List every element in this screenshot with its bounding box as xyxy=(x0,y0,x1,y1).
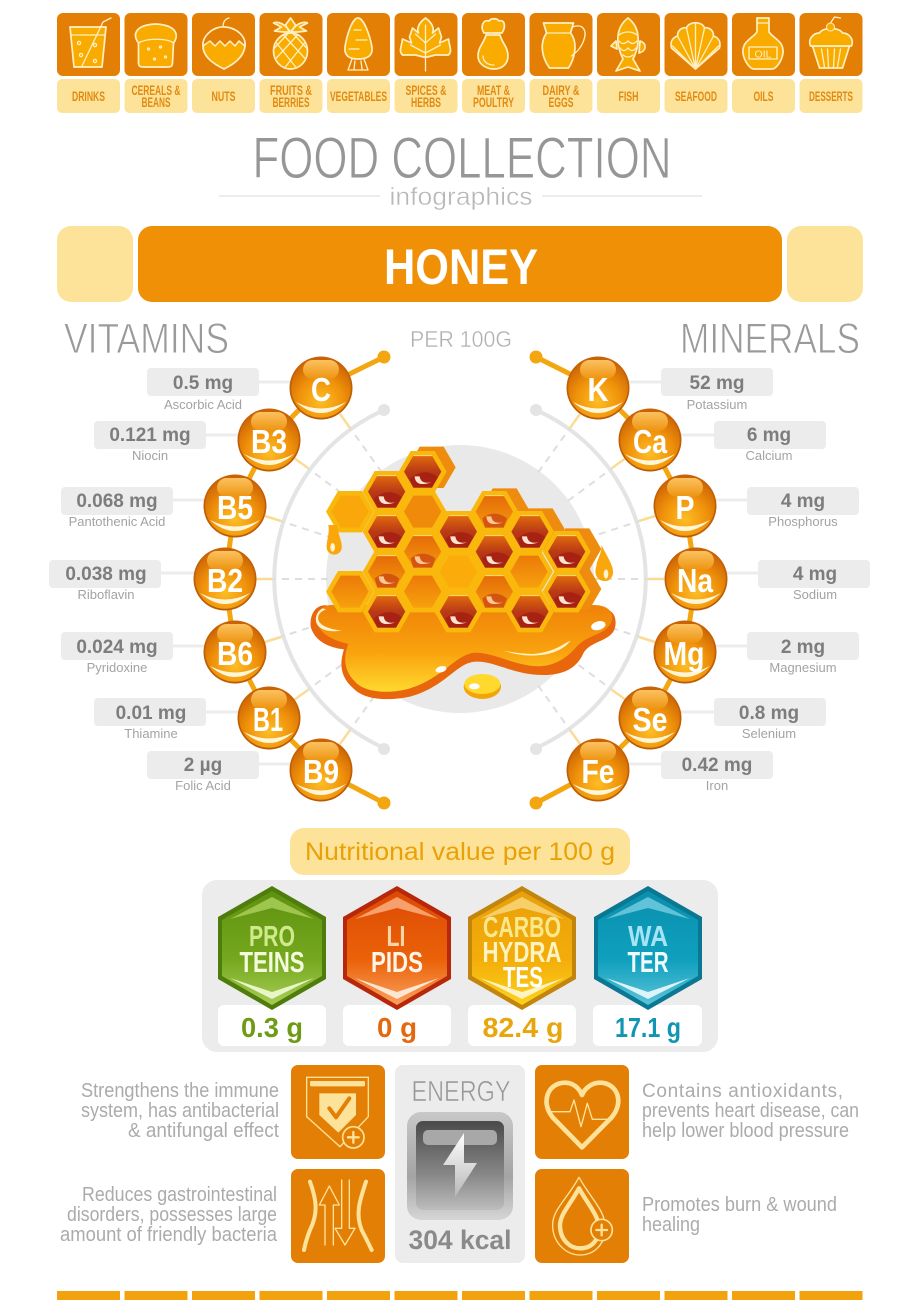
macro: carbohydrates xyxy=(468,886,576,1046)
category: desserts xyxy=(800,13,862,113)
category: cereals and beans: BEANS xyxy=(142,95,170,110)
macro: lipids: 0 g xyxy=(377,1012,417,1043)
icon: jug xyxy=(542,23,585,68)
benefit text: healing: healing xyxy=(642,1214,700,1236)
mineral K: Potassium xyxy=(687,397,747,412)
macro: carbohydrates: TES xyxy=(503,962,543,994)
benefit text: heart: prevents heart disease, can xyxy=(642,1100,859,1122)
benefit text: immune: system, has antibacterial xyxy=(81,1100,279,1122)
category: spices and herbs: SPICES & xyxy=(406,83,447,98)
macro: water: WA xyxy=(628,921,668,953)
bottom colour strip xyxy=(57,1291,862,1300)
vitamin B9: Folic Acid xyxy=(175,778,231,793)
category: spices and herbs: HERBS xyxy=(411,95,441,110)
mineral P: Phosphorus xyxy=(768,514,838,529)
category: fruits and berries xyxy=(260,13,322,113)
mineral Fe: Iron xyxy=(706,778,728,793)
chain: vitamins xyxy=(225,350,390,810)
macro: lipids: LI xyxy=(386,921,406,953)
category: fruits and berries: FRUITS & xyxy=(270,83,312,98)
category: dairy and eggs xyxy=(530,13,592,113)
vitamin B2: 0.038 mg xyxy=(65,564,147,585)
honey puddle xyxy=(311,605,616,699)
vitamin B3: 0.121 mg xyxy=(109,425,191,446)
category: drinks: DRINKS xyxy=(72,89,105,104)
macro: carbohydrates: 82.4 g xyxy=(482,1012,564,1043)
vitamin B6: Pyridoxine xyxy=(87,660,147,675)
macro: carbohydrates: HYDRA xyxy=(482,937,562,969)
mineral Se: Selenium xyxy=(742,726,796,741)
mineral Se: Se xyxy=(632,701,668,738)
vitamin B1 xyxy=(94,686,300,750)
benefit text: digestion: disorders, possesses large xyxy=(67,1204,277,1226)
energy value: 304 kcal xyxy=(408,1225,512,1255)
mineral Ca: Calcium xyxy=(746,448,792,463)
benefit text: heart xyxy=(642,1081,859,1142)
heading: minerals: MINERALS xyxy=(680,315,860,363)
comb side shadows xyxy=(408,447,611,610)
mineral K xyxy=(566,356,773,420)
vitamin B5: B5 xyxy=(217,489,253,526)
icon: chicken drumstick xyxy=(478,19,508,69)
category: meat and poultry: MEAT & xyxy=(477,83,510,98)
macro: proteins xyxy=(218,886,326,1046)
mineral Fe: 0.42 mg xyxy=(682,755,752,776)
chain: minerals xyxy=(530,350,696,810)
benefit text: healing xyxy=(642,1194,837,1236)
ring arcs xyxy=(274,404,646,755)
vitamin C xyxy=(147,356,352,420)
macro: proteins: PRO xyxy=(249,921,295,953)
mineral Fe: Fe xyxy=(582,753,614,790)
category: fish: FISH xyxy=(618,89,638,104)
nutritional value pill xyxy=(290,828,630,875)
energy heading: ENERGY xyxy=(412,1076,510,1108)
banner: honey: HONEY xyxy=(384,239,538,295)
category: vegetables: VEGETABLES xyxy=(330,89,387,104)
category: dairy and eggs: DAIRY & xyxy=(542,83,580,98)
category: drinks xyxy=(57,13,120,113)
icon: energy bolt xyxy=(407,1112,513,1220)
per 100g: PER 100G xyxy=(410,326,512,352)
category: dairy and eggs: EGGS xyxy=(548,95,574,110)
category: meat and poultry xyxy=(462,13,525,113)
vitamin B5 xyxy=(61,474,266,538)
benefit text: digestion xyxy=(60,1184,278,1246)
vitamin C: Ascorbic Acid xyxy=(164,397,242,412)
macro: proteins: 0.3 g xyxy=(241,1012,303,1043)
title: FOOD COLLECTION xyxy=(252,126,672,191)
vitamin B1: Thiamine xyxy=(124,726,178,741)
icon: glass with straw xyxy=(70,18,111,67)
vitamin B9: B9 xyxy=(303,753,339,790)
mineral K: 52 mg xyxy=(690,373,744,394)
icon: fish xyxy=(611,18,645,71)
vitamin B1: B1 xyxy=(253,701,283,738)
icon: hazelnut xyxy=(203,18,245,69)
mineral Na: Na xyxy=(677,562,714,599)
icon: oil bottle: OIL xyxy=(755,48,772,60)
vitamin C: 0.5 mg xyxy=(173,373,233,394)
vitamin B3 xyxy=(94,408,300,472)
comb cells xyxy=(331,456,585,628)
category: vegetables xyxy=(327,13,390,113)
mineral P xyxy=(654,474,859,538)
macro: proteins: TEINS xyxy=(240,947,304,979)
vitamin B3: Niocin xyxy=(132,448,168,463)
mineral Ca xyxy=(618,408,826,472)
category: cereals and beans: CEREALS & xyxy=(132,83,181,98)
mineral Ca: Ca xyxy=(633,423,668,460)
macro: carbohydrates: CARBO xyxy=(483,912,561,944)
macro: water: TER xyxy=(628,947,669,979)
mineral Ca: 6 mg xyxy=(747,425,791,446)
radial dashed links xyxy=(256,414,664,744)
category: meat and poultry: POULTRY xyxy=(473,95,514,110)
mineral Na xyxy=(664,548,870,610)
mineral P: 4 mg xyxy=(781,491,825,512)
icon tile: heart xyxy=(535,1065,629,1159)
macro: water xyxy=(593,886,702,1046)
icon: pineapple xyxy=(274,18,308,69)
vitamin B3: B3 xyxy=(251,423,287,460)
comb body xyxy=(326,451,591,632)
icon: carrot xyxy=(345,18,372,70)
benefit text: immune: & antifungal effect xyxy=(128,1120,279,1142)
mineral Mg: Mg xyxy=(664,635,704,672)
honey drips xyxy=(327,525,613,581)
benefit text: immune: Strengthens the immune xyxy=(81,1080,279,1102)
mineral Fe xyxy=(566,738,773,802)
vitamin C: C xyxy=(311,371,331,408)
category: spices and herbs xyxy=(394,13,458,113)
mineral Na: 4 mg xyxy=(793,564,837,585)
category: seafood xyxy=(664,13,728,113)
category: cereals and beans xyxy=(124,13,188,113)
heading: vitamins: VITAMINS xyxy=(64,315,229,363)
vitamin B2: B2 xyxy=(207,562,243,599)
mineral Se xyxy=(618,686,826,750)
category: fruits and berries: BERRIES xyxy=(272,95,310,110)
icon tile: shield xyxy=(291,1065,385,1159)
macro: water: 17.1 g xyxy=(615,1012,681,1043)
mineral Na: Sodium xyxy=(793,587,837,602)
category: nuts xyxy=(192,13,255,113)
mineral Mg: Magnesium xyxy=(769,660,837,675)
energy panel xyxy=(395,1065,525,1263)
vitamin B5: Pantothenic Acid xyxy=(69,514,165,529)
vitamin B6: 0.024 mg xyxy=(76,637,158,658)
category: oils: OILS xyxy=(754,89,774,104)
mineral Se: 0.8 mg xyxy=(739,703,799,724)
vitamin B9: 2 µg xyxy=(184,755,222,776)
mineral K: K xyxy=(588,371,609,408)
honeycomb illustration xyxy=(311,447,616,699)
macro: lipids xyxy=(343,886,451,1046)
grey circle behind honey xyxy=(326,445,594,713)
nutritional value pill: Nutritional value per 100 g xyxy=(305,838,615,866)
icon: parsley leaf xyxy=(400,18,451,71)
vitamin B6: B6 xyxy=(217,635,253,672)
benefit text: immune xyxy=(81,1080,279,1142)
benefit text: digestion: amount of friendly bacteria xyxy=(60,1224,278,1246)
banner: honey xyxy=(57,226,863,302)
benefit text: heart: Contains antioxidants, xyxy=(642,1081,843,1102)
vitamin B9 xyxy=(147,738,352,802)
icon: cupcake xyxy=(810,17,852,68)
benefit text: digestion: Reduces gastrointestinal xyxy=(82,1184,277,1206)
mineral P: P xyxy=(676,489,694,526)
icon tile: intestines xyxy=(291,1169,385,1263)
macro: lipids: PIDS xyxy=(371,947,423,979)
panel: macronutrients xyxy=(202,880,718,1052)
benefit text: healing: Promotes burn & wound xyxy=(642,1194,837,1216)
mineral Mg: 2 mg xyxy=(781,637,825,658)
honey drop xyxy=(464,674,501,699)
category: nuts: NUTS xyxy=(212,89,236,104)
icon tile: drop xyxy=(535,1169,629,1263)
vitamin B2: Riboflavin xyxy=(77,587,135,602)
benefit text: heart: help lower blood pressure xyxy=(642,1120,849,1142)
subtitle: infographics xyxy=(390,183,532,211)
mineral Mg xyxy=(654,620,859,684)
vitamin B6 xyxy=(61,620,266,684)
category: desserts: DESSERTS xyxy=(809,89,853,104)
category: seafood: SEAFOOD xyxy=(675,89,717,104)
vitamin B1: 0.01 mg xyxy=(116,703,186,724)
category: oils xyxy=(732,13,795,113)
icon: shell xyxy=(671,23,720,69)
category: fish xyxy=(597,13,660,113)
vitamin B2 xyxy=(49,548,256,610)
vitamin B5: 0.068 mg xyxy=(76,491,158,512)
icon: bread xyxy=(136,24,176,67)
